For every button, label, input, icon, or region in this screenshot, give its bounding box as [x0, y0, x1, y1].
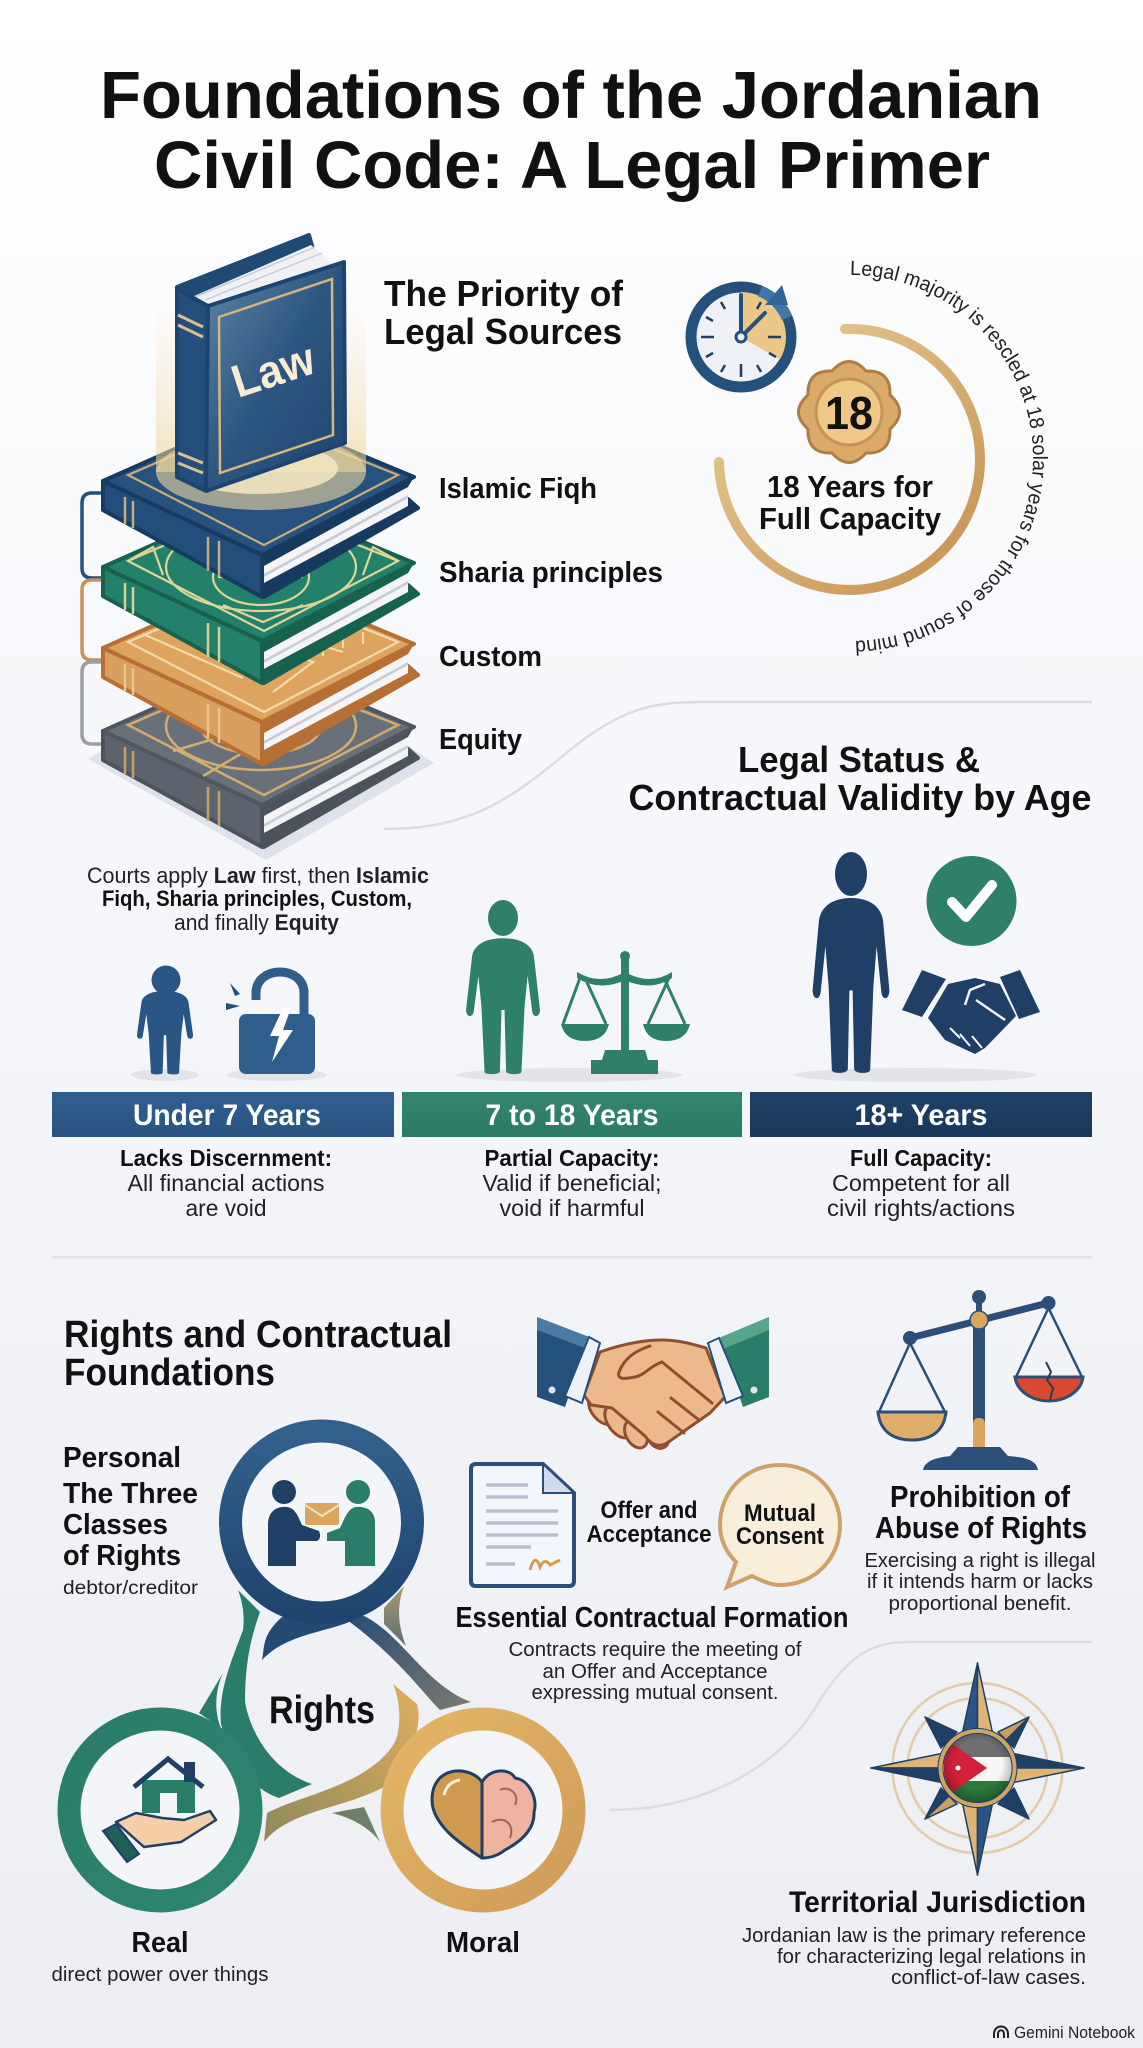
three classes labels: Personal [63, 1442, 181, 1474]
source labels: Equity [439, 724, 522, 756]
ring [719, 329, 980, 590]
panel: legal status by age [52, 739, 1092, 1221]
book title: Law [225, 332, 321, 408]
three classes labels: The Three [63, 1478, 198, 1510]
three classes labels: debtor/creditor [63, 1578, 199, 1599]
text: territorial jurisdiction: Jordanian law is the primary reference [742, 1925, 1086, 1947]
decorative curve [384, 702, 1092, 829]
column: under 7 years: All financial actions [128, 1170, 324, 1196]
text: essential contractual formation: expressing mutual consent. [532, 1682, 778, 1704]
text: territorial jurisdiction: conflict-of-law cases. [891, 1967, 1086, 1989]
icon: 18 badge: 18 [825, 387, 873, 439]
panel: rights and contractual foundations [52, 1290, 1096, 1986]
icon: people exchanging [268, 1480, 375, 1566]
label: offer and acceptance [586, 1497, 712, 1548]
text: prohibition of abuse [864, 1479, 1096, 1615]
callout: mutual consent: Consent [736, 1523, 824, 1550]
text: prohibition of abuse: if it intends harm or lacks [867, 1571, 1093, 1593]
three classes labels: of Rights [63, 1540, 181, 1572]
heading: 18 years [759, 469, 942, 536]
icon: broken lock [226, 972, 327, 1081]
stack shadow [88, 740, 434, 860]
label: offer and acceptance: Acceptance [586, 1521, 712, 1548]
heading: legal status: Legal Status & [738, 739, 980, 780]
source labels: Sharia principles [439, 557, 663, 589]
heading: rights and contractual: Rights and Contractual [64, 1314, 452, 1356]
book: sharia principles [100, 540, 420, 685]
icon: compass with flag [871, 1663, 1084, 1875]
three classes labels: Classes [63, 1509, 168, 1541]
caption: courts order: Courts apply Law first, then Islamic [87, 863, 429, 888]
icon: child [131, 966, 199, 1081]
icon: unbalanced scales [878, 1290, 1083, 1470]
column: 7 to 18 years: void if harmful [500, 1195, 644, 1221]
column: 18+ years: civil rights/actions [827, 1195, 1015, 1221]
main points [871, 1663, 1084, 1875]
title: Civil Code: A Legal Primer [154, 128, 990, 203]
label: moral: Moral [446, 1927, 520, 1959]
column: 18+ years: Full Capacity: [850, 1145, 992, 1171]
text: prohibition of abuse: Prohibition of [890, 1479, 1071, 1514]
column: 18+ years [750, 1092, 1092, 1221]
panel: priority of legal sources [82, 235, 663, 935]
centre label: Rights [269, 1689, 375, 1732]
text: prohibition of abuse: Abuse of Rights [875, 1510, 1087, 1545]
title: Foundations of the Jordanian [100, 58, 1042, 133]
heading: legal status [628, 739, 1092, 818]
icon: clock [691, 285, 791, 387]
heading: priority of legal sources [384, 273, 624, 352]
real circle [69, 1719, 251, 1901]
book: custom [100, 624, 420, 766]
icon: law book [177, 235, 345, 491]
text: essential contractual formation: Essential Contractual Formation [456, 1602, 848, 1634]
panel: 18 years for full capacity [686, 260, 1048, 656]
diagram: rights triad [69, 1431, 574, 1901]
icon: 18 badge [798, 362, 900, 462]
text: territorial jurisdiction [742, 1886, 1086, 1989]
flag of Jordan [944, 1734, 1012, 1802]
watermark: Gemini Notebook [1014, 2023, 1135, 2042]
connector brackets [82, 493, 103, 744]
title [100, 58, 1042, 203]
text: essential contractual formation: Contracts require the meeting of [508, 1639, 802, 1661]
three classes labels [63, 1442, 199, 1599]
icon: adolescent [456, 900, 682, 1082]
source labels: Islamic Fiqh [439, 473, 597, 505]
column: 7 to 18 years: Partial Capacity: [484, 1145, 660, 1171]
moral circle [392, 1719, 574, 1901]
column: 7 to 18 years: Valid if beneficial; [482, 1170, 662, 1196]
label: real [52, 1927, 268, 1986]
icon: contract document [471, 1464, 574, 1586]
label: real: direct power over things [52, 1964, 268, 1986]
column: under 7 years: Lacks Discernment: [120, 1145, 332, 1171]
callout: mutual consent: Mutual [744, 1500, 816, 1527]
caption: courts order [87, 863, 429, 935]
panel: territorial jurisdiction [742, 1663, 1086, 1989]
diagonal points [925, 1717, 1029, 1819]
heading: priority of legal sources: Legal Sources [384, 311, 622, 352]
heading: rights and contractual: Foundations [64, 1352, 275, 1394]
icon: green scales [561, 951, 690, 1074]
column: 18+ years: Competent for all [832, 1170, 1010, 1196]
column: under 7 years: are void [186, 1195, 266, 1221]
text: prohibition of abuse: Exercising a right is illegal [864, 1550, 1096, 1572]
column: 18+ years: 18+ Years [854, 1099, 988, 1132]
caption: courts order: and finally Equity [174, 910, 340, 935]
icon: navy handshake [902, 970, 1040, 1054]
icon: heart and brain [432, 1771, 535, 1858]
column: 7 to 18 years [402, 1092, 742, 1221]
text: essential contractual formation: an Offer and Acceptance [542, 1661, 768, 1683]
glow under law book [156, 300, 366, 510]
swirl bands [336, 1612, 471, 1710]
source labels [439, 473, 663, 756]
label: offer and acceptance: Offer and [600, 1497, 698, 1524]
column: under 7 years [52, 1092, 394, 1221]
icon: green check [926, 856, 1016, 946]
heading: priority of legal sources: The Priority of [384, 273, 624, 314]
column: 7 to 18 years: 7 to 18 Years [486, 1099, 658, 1132]
text: territorial jurisdiction: for characterizing legal relations in [777, 1946, 1086, 1968]
icon: house in hand [103, 1759, 216, 1862]
text: essential contractual formation [456, 1602, 848, 1704]
heading: rights and contractual [64, 1314, 452, 1394]
text: prohibition of abuse: proportional benefit. [888, 1593, 1072, 1615]
source labels: Custom [439, 641, 542, 673]
personal circle [230, 1431, 412, 1613]
heading: 18 years: 18 Years for [767, 469, 933, 504]
decorative curve [610, 1642, 1092, 1810]
book: equity [100, 706, 420, 849]
curved caption: Legal majority is rescled at 18 solar years for those of sound mind [852, 260, 1048, 656]
heading: 18 years: Full Capacity [759, 501, 942, 536]
icon: adult [793, 852, 1037, 1082]
text: territorial jurisdiction: Territorial Jurisdiction [789, 1886, 1086, 1919]
heading: legal status: Contractual Validity by Age [628, 777, 1092, 818]
label: real: Real [132, 1927, 188, 1959]
callout: mutual consent [720, 1465, 840, 1587]
caption: courts order: Fiqh, Sharia principles, Custom, [102, 886, 412, 911]
column: under 7 years: Under 7 Years [133, 1099, 321, 1132]
book: islamic fiqh [103, 412, 418, 597]
icon: colour handshake [537, 1317, 769, 1452]
